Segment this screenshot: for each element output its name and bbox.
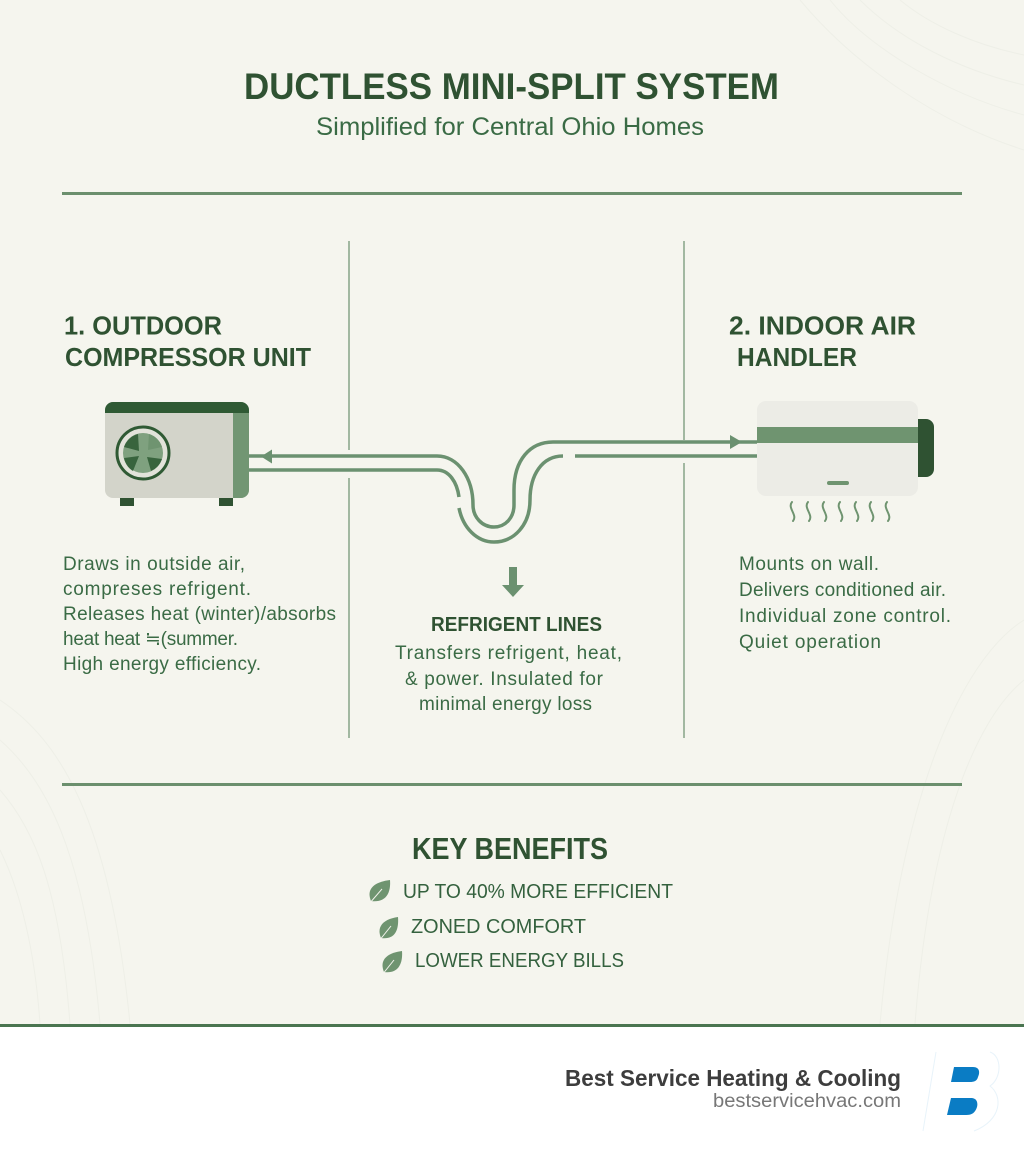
benefit: lower energy bills: LOWER ENERGY BILLS (415, 949, 624, 972)
heading: indoor air handler (729, 312, 916, 372)
heading: key benefits: KEY BENEFITS (412, 832, 608, 866)
logo (923, 1052, 999, 1131)
text: refrigerant lines: & power. Insulated for (405, 669, 604, 690)
footer (0, 1024, 1024, 1154)
benefit: zoned comfort: ZONED COMFORT (411, 915, 586, 938)
refrigerant lines (249, 442, 757, 542)
brand name: Best Service Heating & Cooling (565, 1065, 901, 1091)
arrow: to indoor unit (730, 435, 742, 449)
text: outdoor unit description: heat heat ≒(summer. (63, 629, 238, 650)
heading: outdoor compressor unit (64, 312, 311, 372)
text: outdoor unit description: compreses refrigent. (63, 579, 251, 600)
heading: outdoor compressor unit: COMPRESSOR UNIT (65, 344, 311, 372)
text: outdoor unit description: Draws in outside air, (63, 554, 245, 575)
text: outdoor unit description: High energy efficiency. (63, 654, 261, 675)
text: indoor unit description: Quiet operation (739, 632, 881, 653)
heading: indoor air handler: HANDLER (737, 344, 857, 372)
website: bestservicehvac.com (713, 1091, 901, 1112)
icon: down arrow (502, 567, 524, 597)
heading: outdoor compressor unit: 1. OUTDOOR (64, 312, 222, 340)
text: refrigerant lines (395, 614, 622, 715)
text: outdoor unit description: Releases heat (winter)/absorbs (63, 604, 336, 625)
text: indoor unit description (739, 554, 951, 653)
text: indoor unit description: Mounts on wall. (739, 554, 879, 575)
arrow: to outdoor unit (261, 450, 272, 464)
text: outdoor unit description (63, 554, 336, 675)
heading: indoor air handler: 2. INDOOR AIR (729, 312, 916, 340)
text: indoor unit description: Individual zone control. (739, 606, 951, 627)
icon: fan (117, 427, 169, 479)
subtitle: Simplified for Central Ohio Homes (316, 113, 704, 141)
icon: indoor air handler (757, 401, 934, 521)
benefit: efficiency: UP TO 40% MORE EFFICIENT (403, 880, 673, 903)
text: indoor unit description: Delivers conditioned air. (739, 580, 946, 601)
text: refrigerant lines: minimal energy loss (419, 694, 592, 715)
title: DUCTLESS MINI-SPLIT SYSTEM (244, 65, 779, 107)
text: refrigerant lines: Transfers refrigent, heat, (395, 643, 622, 664)
icon: outdoor compressor unit (105, 402, 249, 506)
text: refrigerant lines: REFRIGENT LINES (431, 614, 602, 636)
icon: airflow waves (791, 502, 889, 521)
